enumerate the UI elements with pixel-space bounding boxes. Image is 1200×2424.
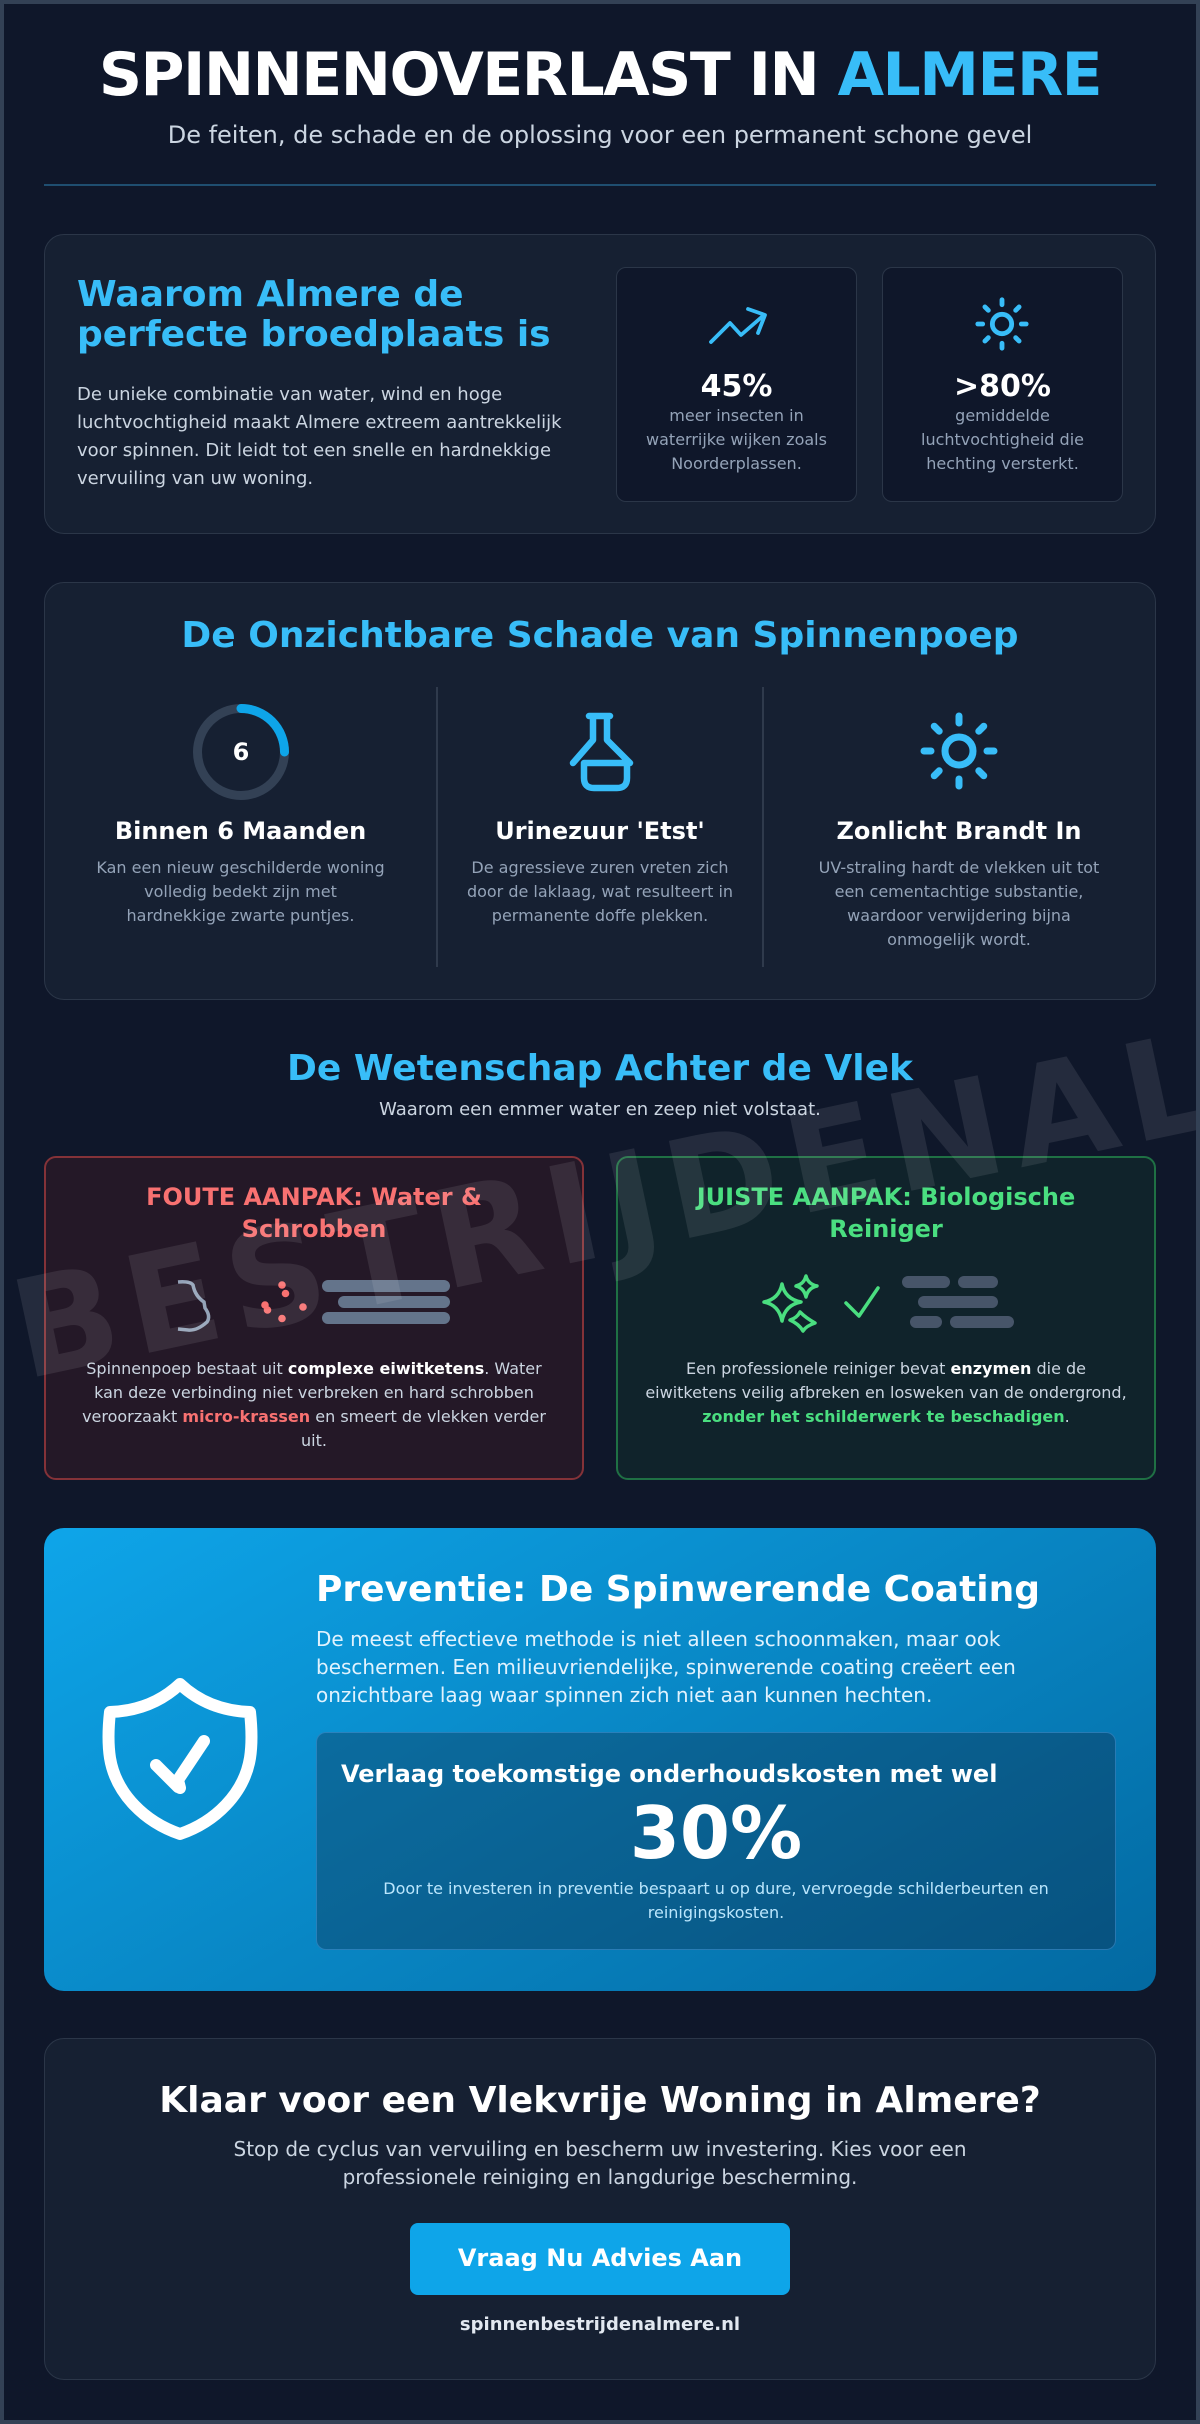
card text: zonder het schilderwerk te beschadigen. xyxy=(702,1407,1070,1426)
divider xyxy=(762,687,764,967)
website: spinnenbestrijdenalmere.nl xyxy=(460,2314,740,2335)
card text: uit. xyxy=(301,1431,327,1450)
big number: 30% xyxy=(630,1791,802,1875)
card text: kan deze verbinding niet verbreken en hard schrobben xyxy=(94,1383,534,1402)
column text: hardnekkige zwarte puntjes. xyxy=(127,906,354,925)
caption xyxy=(921,406,1084,473)
column text: Kan een nieuw geschilderde woning xyxy=(96,858,385,877)
callout text xyxy=(383,1879,1049,1922)
body text: beschermen. Een milieuvriendelijke, spinwerende coating creëert een xyxy=(316,1655,1016,1679)
icon: sun small xyxy=(975,297,1029,351)
column text: waardoor verwijdering bijna xyxy=(847,906,1071,925)
card title: Reiniger xyxy=(829,1215,943,1243)
heading: De Onzichtbare Schade van Spinnenpoep xyxy=(181,615,1019,656)
title: SPINNENOVERLAST IN ALMERE xyxy=(99,40,1101,110)
intro text: voor spinnen. Dit leidt tot een snelle en hardnekkige xyxy=(77,440,551,461)
intro text: De unieke combinatie van water, wind en hoge xyxy=(77,384,502,405)
column title: Urinezuur 'Etst' xyxy=(495,817,705,845)
card title: Schrobben xyxy=(242,1215,386,1243)
column text xyxy=(819,858,1099,949)
callout heading: Verlaag toekomstige onderhoudskosten met wel xyxy=(341,1760,997,1788)
panel: invisible damage xyxy=(44,582,1156,1000)
heading: perfecte broedplaats is xyxy=(77,314,551,355)
card text xyxy=(645,1359,1127,1426)
stat card: insects xyxy=(616,267,857,502)
column text: De agressieve zuren vreten zich xyxy=(471,858,729,877)
column text: door de laklaag, wat resulteert in xyxy=(467,882,733,901)
divider xyxy=(436,687,438,967)
value: >80% xyxy=(954,369,1051,404)
panel: right approach xyxy=(616,1156,1156,1480)
heading: Klaar voor een Vlekvrije Woning in Almere? xyxy=(159,2080,1041,2121)
panel: wrong approach xyxy=(44,1156,584,1480)
column text: een cementachtige substantie, xyxy=(835,882,1083,901)
section heading: science xyxy=(287,1048,914,1120)
card text: Spinnenpoep bestaat uit complexe eiwitketens. Water xyxy=(86,1359,542,1378)
callout text: reinigingskosten. xyxy=(648,1903,784,1922)
value: 45% xyxy=(701,369,772,404)
icon: flask xyxy=(570,712,634,792)
card title: JUISTE AANPAK: Biologische xyxy=(697,1183,1075,1211)
column title: Zonlicht Brandt In xyxy=(836,817,1082,845)
icon: six month ring xyxy=(193,704,289,800)
card text: veroorzaakt micro-krassen en smeert de vlekken verder xyxy=(82,1407,546,1426)
caption: Noorderplassen. xyxy=(671,454,802,473)
column text xyxy=(467,858,733,925)
button xyxy=(410,2223,790,2295)
body text xyxy=(316,1627,1016,1707)
card title xyxy=(695,1183,1075,1243)
caption: meer insecten in xyxy=(669,406,804,425)
column title: Binnen 6 Maanden xyxy=(115,817,366,845)
caption: gemiddelde xyxy=(955,406,1050,425)
panel: prevention coating xyxy=(44,1528,1156,1991)
button: Vraag Nu Advies Aan xyxy=(458,2244,742,2272)
column text: permanente doffe plekken. xyxy=(492,906,708,925)
card text xyxy=(82,1359,546,1450)
column text: volledig bedekt zijn met xyxy=(144,882,337,901)
icon: shield check xyxy=(102,1678,258,1840)
card title xyxy=(146,1183,482,1243)
heading: Preventie: De Spinwerende Coating xyxy=(316,1569,1040,1610)
callout text: Door te investeren in preventie bespaart u op dure, vervroegde schilderbeurten en xyxy=(383,1879,1049,1898)
caption: luchtvochtigheid die xyxy=(921,430,1084,449)
callout: cost saving xyxy=(316,1732,1116,1950)
panel: why Almere xyxy=(44,234,1156,534)
intro text: vervuiling van uw woning. xyxy=(77,468,313,489)
text: Stop de cyclus van vervuiling en bescherm uw investering. Kies voor een xyxy=(234,2137,966,2161)
heading xyxy=(77,274,551,355)
subtitle: De feiten, de schade en de oplossing voor een permanent schone gevel xyxy=(168,121,1032,149)
icon: six month ring: 6 xyxy=(233,738,249,766)
intro text xyxy=(77,384,562,489)
card text: Een professionele reiniger bevat enzymen die de xyxy=(686,1359,1086,1378)
subheading: Waarom een emmer water en zeep niet volstaat. xyxy=(379,1099,821,1120)
header xyxy=(44,40,1156,186)
column text: onmogelijk wordt. xyxy=(887,930,1031,949)
intro text: luchtvochtigheid maakt Almere extreem aantrekkelijk xyxy=(77,412,562,433)
icon: trending up xyxy=(709,307,767,344)
card text: eiwitketens veilig afbreken en losweken van de ondergrond, xyxy=(645,1383,1127,1402)
body text: De meest effectieve methode is niet alleen schoonmaken, maar ook xyxy=(316,1627,1001,1651)
column text xyxy=(96,858,385,925)
header rule xyxy=(44,184,1156,186)
heading: De Wetenschap Achter de Vlek xyxy=(287,1048,913,1089)
text: professionele reiniging en langdurige bescherming. xyxy=(343,2165,857,2189)
heading: Waarom Almere de xyxy=(77,274,464,315)
panel: call to action xyxy=(44,2038,1156,2380)
text xyxy=(234,2137,966,2189)
column text: UV-straling hardt de vlekken uit tot xyxy=(819,858,1099,877)
body text: onzichtbare laag waar spinnen zich niet aan kunnen hechten. xyxy=(316,1683,932,1707)
caption xyxy=(646,406,827,473)
card title: FOUTE AANPAK: Water & xyxy=(146,1183,482,1211)
caption: waterrijke wijken zoals xyxy=(646,430,827,449)
caption: hechting versterkt. xyxy=(926,454,1079,473)
icon: sun xyxy=(920,712,998,790)
stat card: humidity xyxy=(882,267,1123,502)
